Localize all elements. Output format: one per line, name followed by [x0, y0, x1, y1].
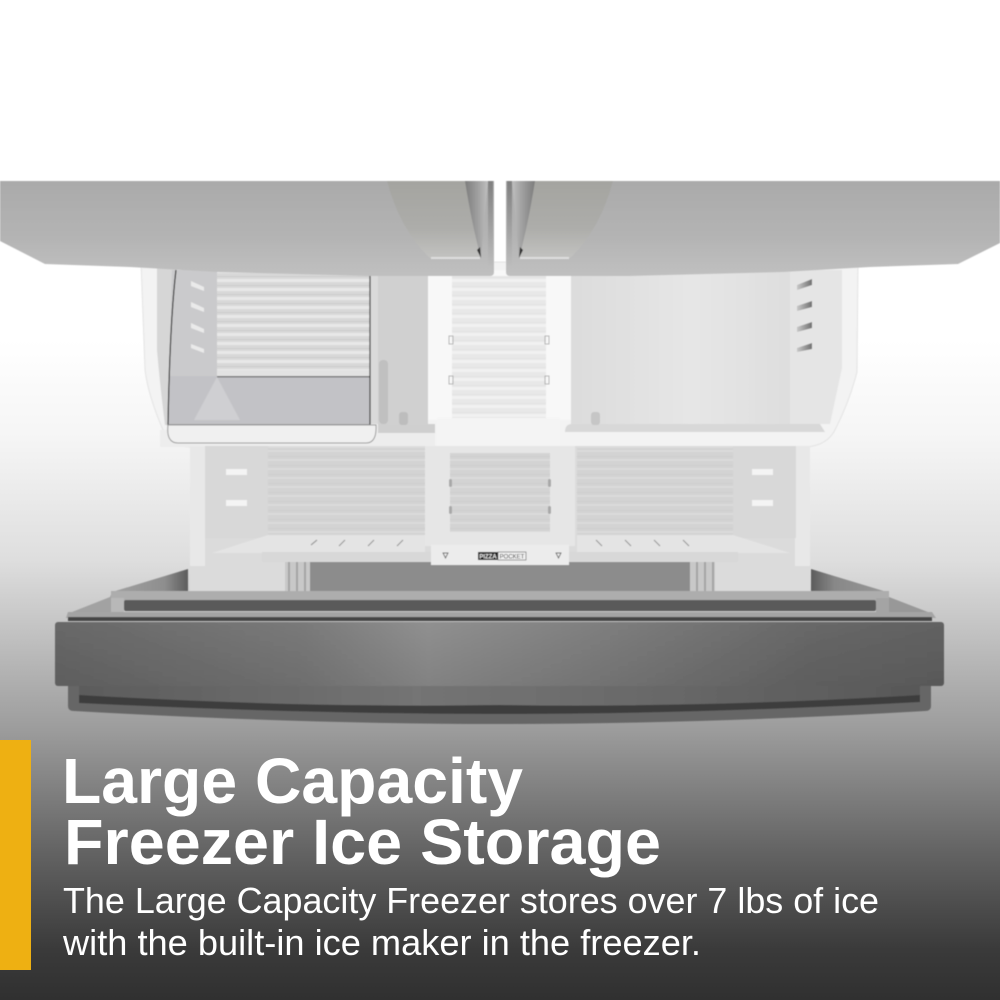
description text: The Large Capacity Freezer stores over 7 lbs of ice — [63, 880, 879, 921]
handle — [68, 686, 931, 724]
vent slots — [797, 279, 812, 352]
accent bar — [0, 740, 31, 970]
description text — [62, 880, 879, 963]
under-basket recess — [285, 562, 715, 592]
center column — [428, 270, 571, 454]
pizza pocket panel: PIZZA — [479, 554, 497, 560]
left door recess — [387, 181, 480, 258]
right door recess — [520, 181, 613, 258]
left door handle — [465, 181, 488, 258]
freezer drawer front — [55, 569, 944, 724]
pizza pocket panel — [431, 545, 569, 565]
left door — [0, 181, 494, 276]
clips — [226, 469, 773, 506]
gasket — [111, 591, 889, 601]
door panels — [0, 181, 1000, 276]
door face — [55, 622, 944, 686]
right door — [506, 181, 1000, 276]
freezer upper compartment — [141, 262, 858, 454]
heading — [62, 745, 661, 878]
freezer lower basket — [190, 446, 810, 592]
ice bin — [157, 267, 378, 443]
side wedges — [67, 569, 188, 614]
right door handle — [512, 181, 535, 258]
refrigerator illustration — [0, 181, 1000, 724]
shelf ledges — [160, 424, 435, 447]
pizza pocket panel: POCKET — [500, 554, 525, 560]
heading: Freezer Ice Storage — [64, 806, 661, 878]
heading: Large Capacity — [62, 745, 523, 817]
description text: with the built-in ice maker in the freezer. — [62, 922, 701, 963]
